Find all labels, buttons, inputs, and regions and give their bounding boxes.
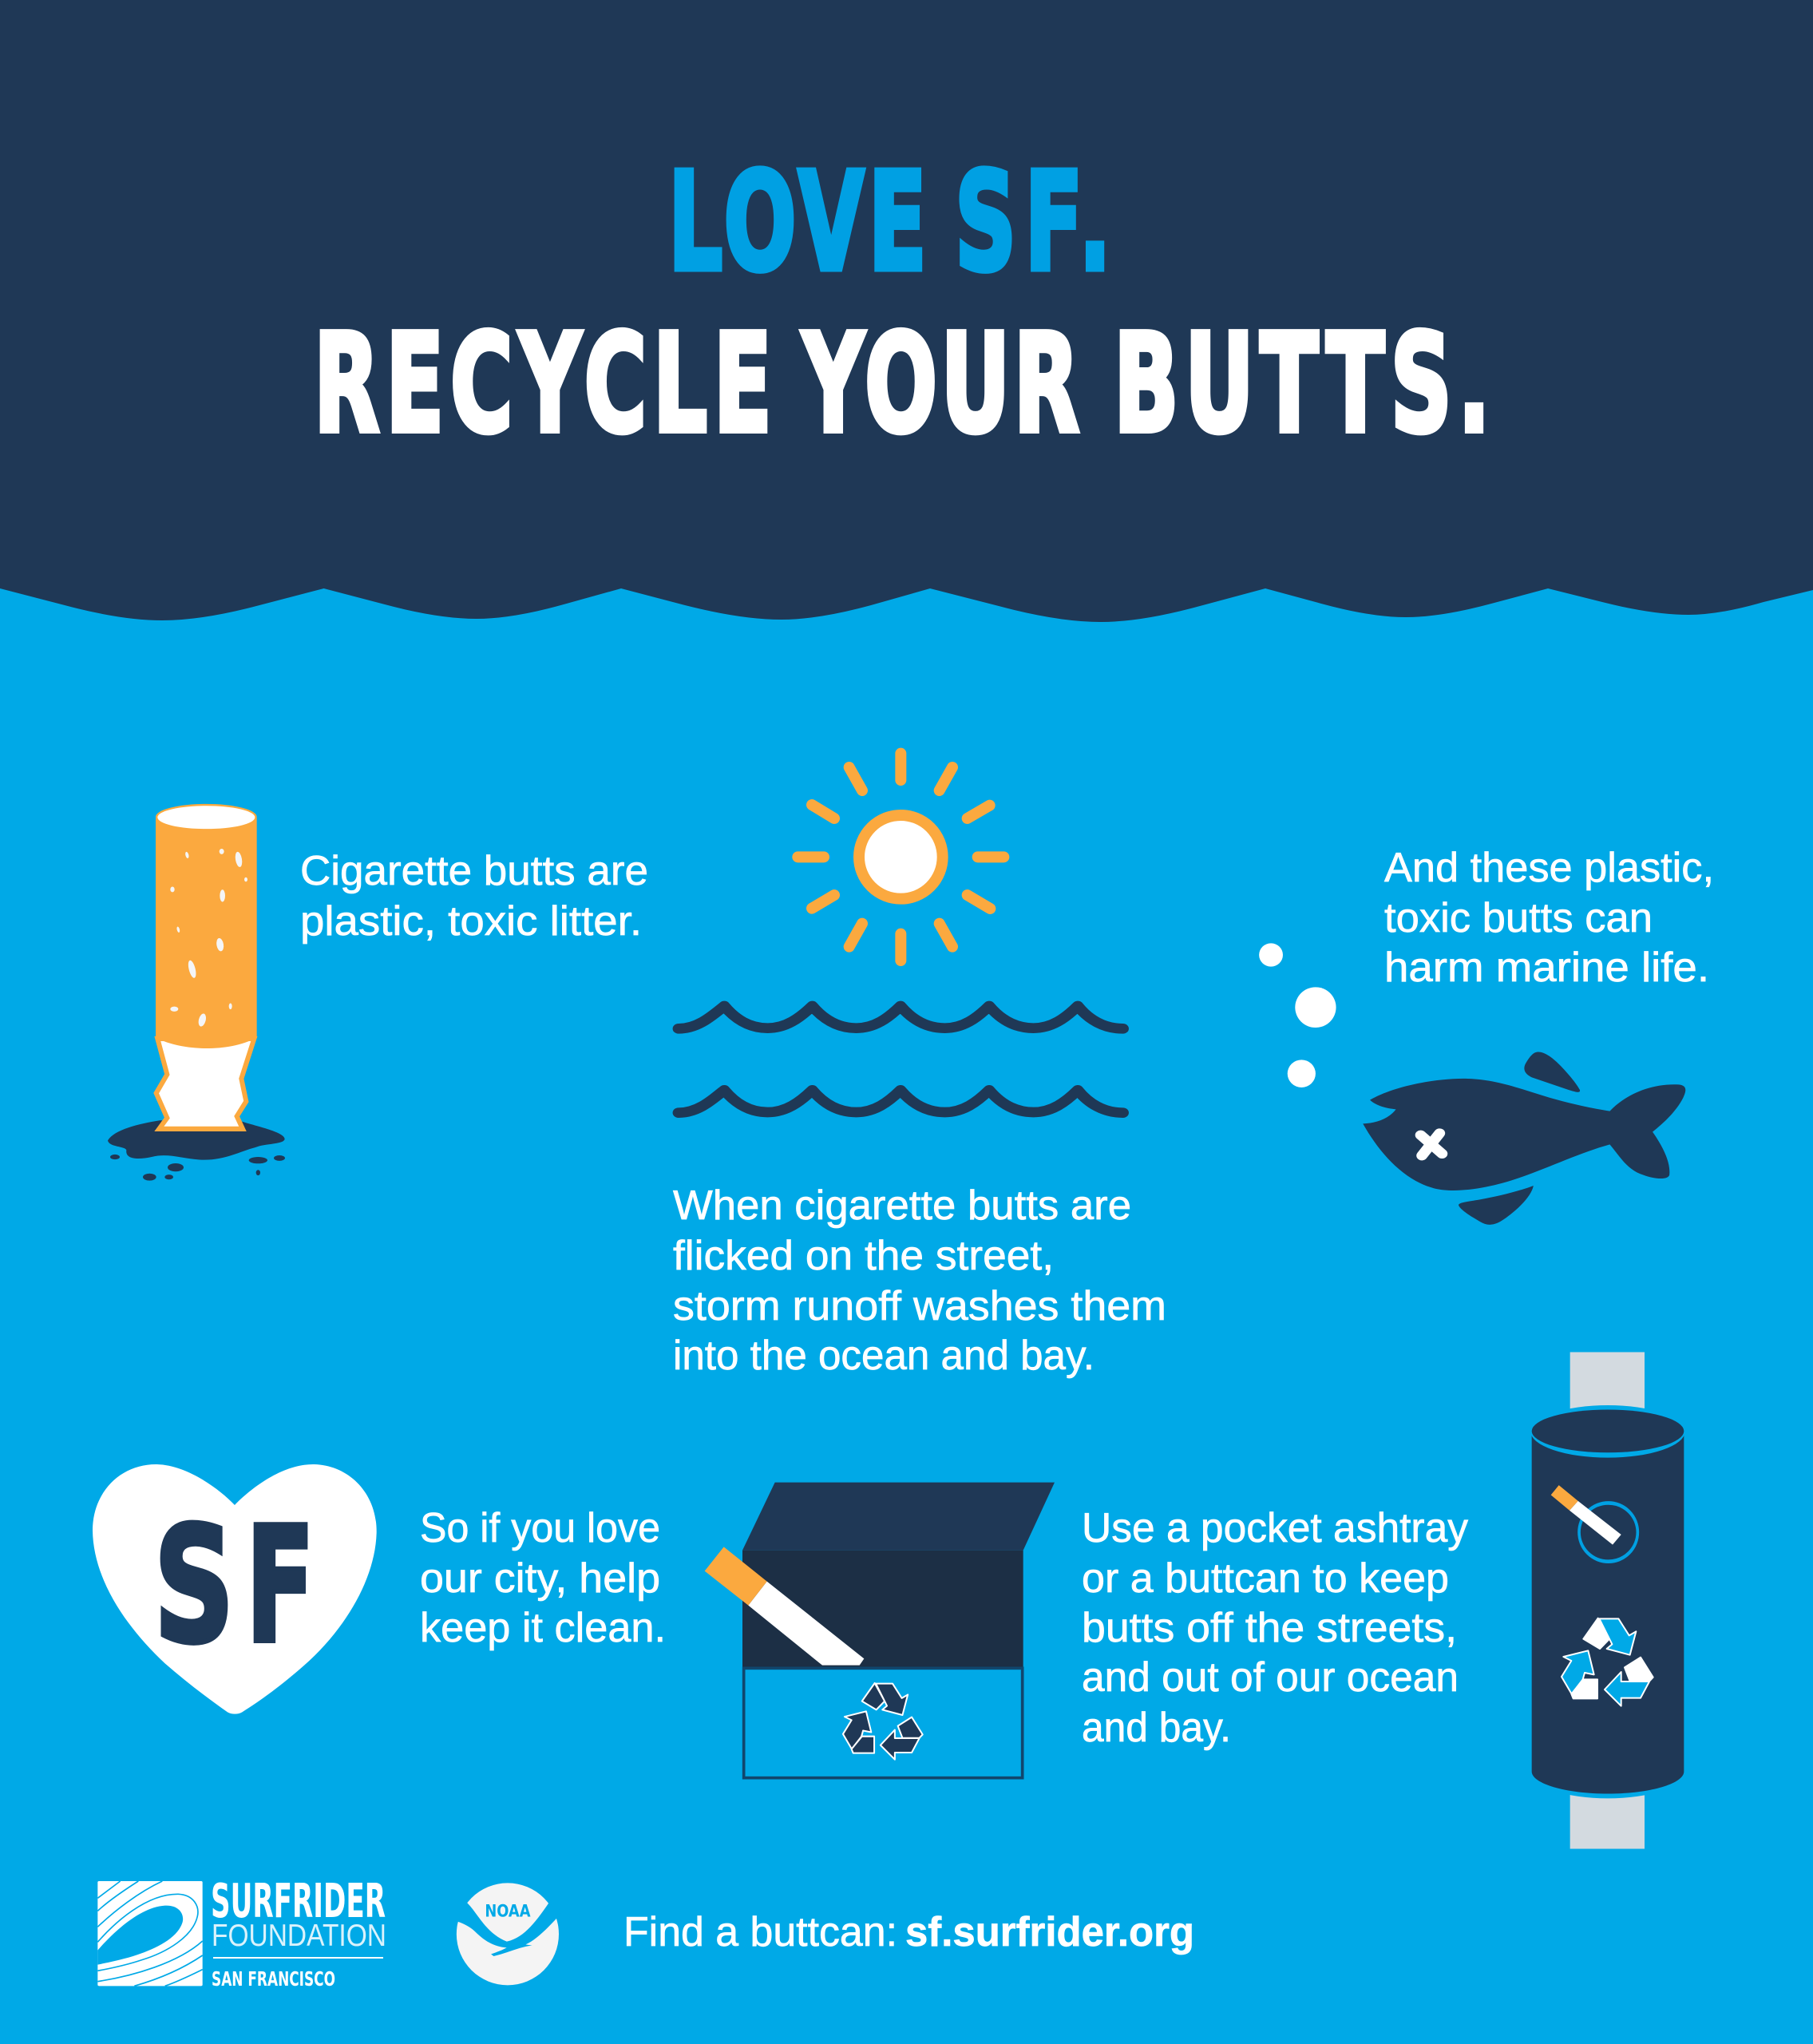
icon: buttcan on pole [1530,1352,1685,1849]
footer call to action: Find a buttcan: [623,1909,897,1955]
footer call to action [623,1909,1194,1955]
logo: Surfrider Foundation San Francisco: FOUNDATION [212,1919,386,1953]
header banner with scalloped wave edge [0,0,1813,622]
text: help keep it clean: So if you love [420,1505,660,1551]
text: plastic toxic litter [300,848,648,945]
text: storm runoff: When cigarette butts are [673,1182,1131,1229]
text: help keep it clean [420,1505,666,1651]
title: BUTTS. [1114,305,1490,463]
logo mark: wave square [97,1881,203,1986]
text: storm runoff: flicked on the street, [673,1233,1054,1279]
logo: Surfrider Foundation San Francisco: SURFRIDER [211,1873,386,1928]
text: pocket ashtray or buttcan: butts off the streets, [1082,1605,1457,1651]
icon: recycle symbol on buttcan [1562,1618,1653,1706]
text: help keep it clean: our city, help [420,1555,660,1602]
icon: SF heart: S [154,1493,234,1678]
footer call to action: sf.surfrider.org [905,1909,1194,1955]
logo: NOAA [454,1883,562,1985]
text: plastic toxic litter: plastic, toxic litter. [300,898,642,945]
logo: NOAA: NOAA [485,1901,531,1921]
text: storm runoff [673,1182,1166,1379]
title: SF. [955,143,1111,302]
icon: bubbles and dead fish [1259,943,1685,1225]
text: storm runoff: into the ocean and bay. [673,1333,1095,1379]
icon: recycle symbol on ashtray [843,1683,923,1760]
text: harm marine life: And these plastic, [1384,845,1714,891]
title [314,143,1490,463]
title: RECYCLE [314,305,772,463]
text: pocket ashtray or buttcan [1082,1505,1468,1751]
text: help keep it clean: keep it clean. [420,1605,666,1651]
logo: Surfrider Foundation San Francisco: SAN FRANCISCO [212,1967,335,1991]
icon: SF heart [93,1464,377,1714]
text: harm marine life [1384,845,1714,991]
text: harm marine life: toxic butts can [1384,895,1653,941]
icon: ocean waves [679,1006,1123,1113]
title: YOUR [801,305,1079,463]
text: pocket ashtray or buttcan: Use a pocket ashtray [1082,1505,1468,1551]
icon: cigarette butt with puddle [108,804,285,1181]
text: pocket ashtray or buttcan: or a buttcan to keep [1082,1555,1449,1602]
text: pocket ashtray or buttcan: and bay. [1082,1705,1231,1751]
icon: sun [798,754,1003,961]
title: LOVE [668,143,927,302]
text: storm runoff: storm runoff washes them [673,1283,1166,1329]
icon: SF heart: F [246,1494,315,1679]
text: plastic toxic litter: Cigarette butts are [300,848,648,894]
text: harm marine life: harm marine life. [1384,945,1709,991]
icon: pocket ashtray [705,1483,1055,1778]
logo: Surfrider Foundation San Francisco [97,1873,386,1991]
text: pocket ashtray or buttcan: and out of our ocean [1082,1654,1459,1701]
